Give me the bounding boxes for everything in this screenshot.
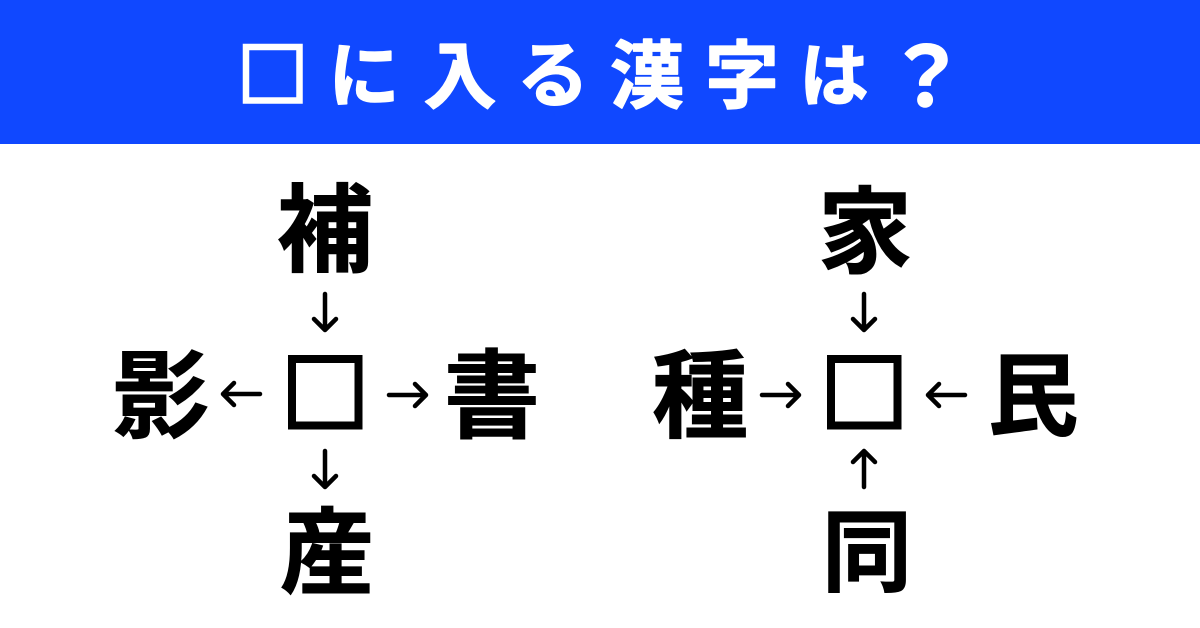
title: に (328, 38, 400, 117)
arrow: bottom down (314, 451, 336, 487)
header banner (0, 0, 1200, 144)
icon: title blank square (246, 47, 300, 100)
kanji: left: 影 (113, 344, 209, 451)
arrow: right to center (928, 384, 965, 406)
title: 漢 (610, 35, 684, 118)
arrow: top down (314, 294, 336, 330)
title (328, 33, 967, 124)
puzzle: right (652, 180, 1079, 604)
arrow: top down (853, 294, 875, 330)
arrow: bottom up (853, 451, 875, 487)
kanji: right: 書 (444, 344, 540, 451)
arrow: pointing right (389, 384, 426, 406)
kanji: bottom: 産 (280, 501, 374, 606)
blank square (292, 359, 358, 426)
arrow: left to center (762, 384, 799, 406)
kanji: top: 家 (818, 180, 912, 285)
title: ？ (885, 33, 967, 124)
title: は (800, 38, 868, 115)
puzzle: left (113, 178, 540, 606)
kanji: top: 補 (277, 178, 373, 285)
title: 入 (424, 37, 496, 118)
title: 字 (705, 35, 779, 118)
kanji: bottom: 同 (822, 504, 912, 604)
blank square (831, 359, 898, 426)
kanji: right: 民 (987, 347, 1079, 448)
arrow: pointing left (223, 383, 260, 405)
kanji: left: 種 (652, 344, 748, 451)
title: る (517, 37, 589, 117)
